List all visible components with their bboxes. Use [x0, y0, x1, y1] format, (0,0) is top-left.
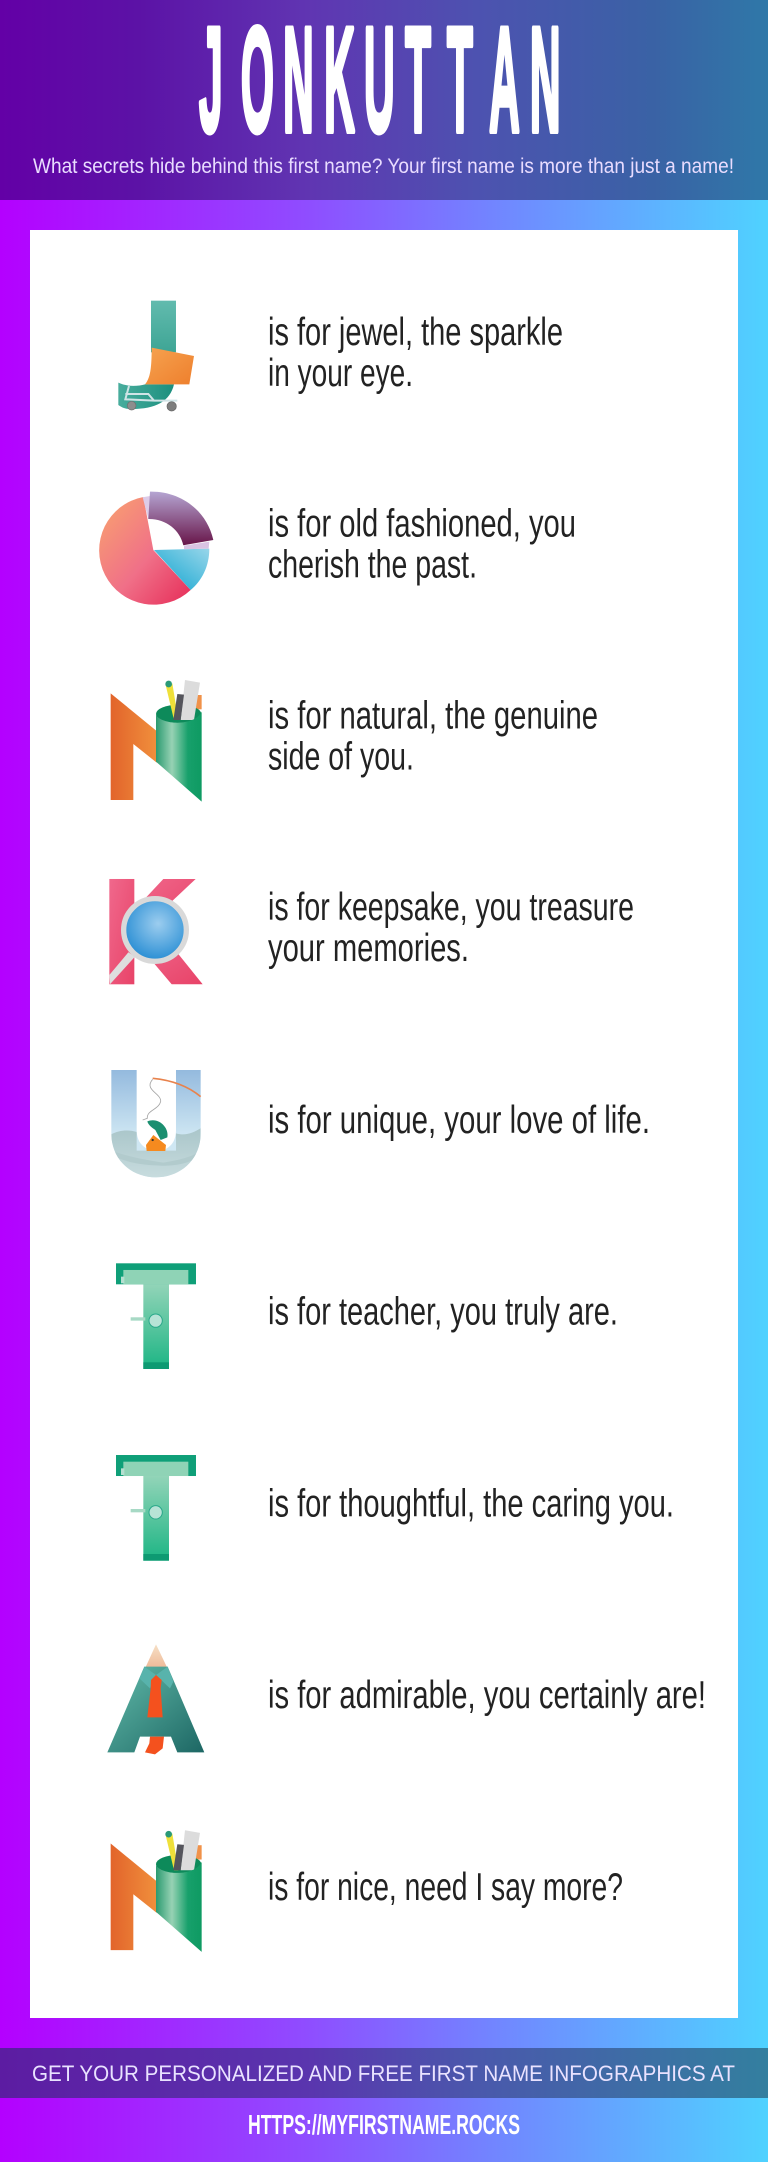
text: N meaning: is for natural, the genuine [268, 694, 598, 737]
icon: letter U with fishing scene [110, 1070, 202, 1180]
text: N meaning: side of you. [268, 735, 414, 778]
white content panel [30, 230, 738, 2018]
text: second N meaning: is for nice, need I say more? [268, 1866, 623, 1909]
icon: second letter T with door [116, 1455, 196, 1561]
footer URL: HTTPS://MYFIRSTNAME.ROCKS [248, 2109, 520, 2140]
title: JONKUTTAN [199, 0, 561, 164]
icon: second letter N with pencil cup [111, 1830, 202, 1952]
text: U meaning: is for unique, your love of life. [268, 1099, 650, 1142]
text: K meaning: your memories. [268, 927, 469, 970]
icon: letter O as pie chart [99, 492, 213, 605]
text: J meaning: in your eye. [268, 352, 413, 395]
text: T meaning: is for teacher, you truly are. [268, 1291, 618, 1334]
icon: letter A with collar and tie [107, 1644, 204, 1754]
text: O meaning: cherish the past. [268, 544, 477, 587]
icon: letter K with magnifying glass [109, 879, 203, 984]
icon: letter N with pencil cup [111, 680, 202, 802]
header band [0, 0, 768, 200]
text: K meaning: is for keepsake, you treasure [268, 886, 634, 929]
icon: letter J with shopping cart [118, 301, 194, 411]
icon: letter T with door [116, 1263, 196, 1369]
text: J meaning: is for jewel, the sparkle [268, 311, 563, 354]
text: O meaning: is for old fashioned, you [268, 503, 576, 546]
footer call-to-action band [0, 2048, 768, 2098]
footer text: GET YOUR PERSONALIZED AND FREE FIRST NAME INFOGRAPHICS AT [32, 2061, 735, 2086]
